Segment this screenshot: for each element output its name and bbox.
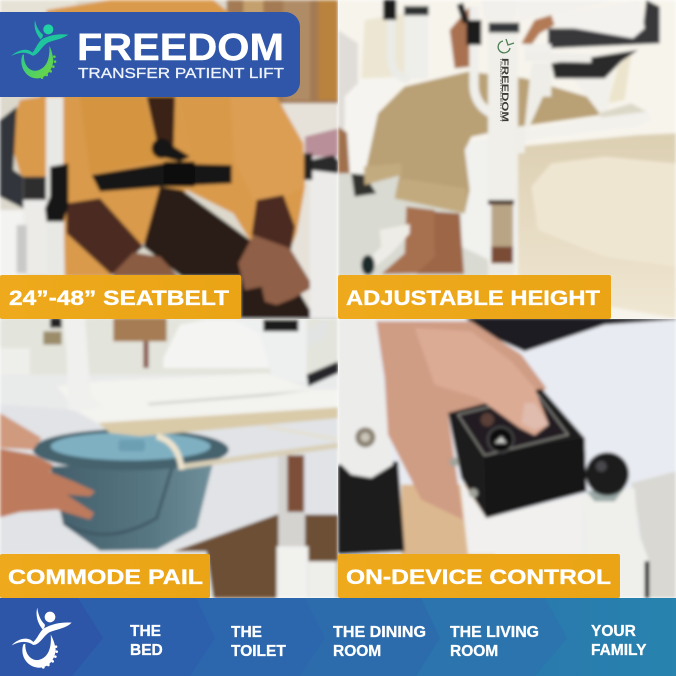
trousers <box>365 72 600 213</box>
main column <box>490 202 515 250</box>
rods and strap <box>183 445 338 466</box>
white bracket <box>631 488 648 566</box>
brand name: FREEDOM <box>77 27 284 69</box>
seat <box>57 373 338 425</box>
label: adjustable height: ADJUSTABLE HEIGHT <box>346 287 600 310</box>
label: on-device control: ON-DEVICE CONTROL <box>346 566 611 589</box>
destination: the bed: THE <box>130 623 161 640</box>
hand <box>376 321 546 520</box>
panel: on-device control photo <box>338 318 676 598</box>
label: commode pail: COMMODE PAIL <box>8 566 203 589</box>
hand <box>0 413 42 450</box>
header badge <box>0 12 300 97</box>
knob <box>586 488 625 501</box>
destination: the living room: ROOM <box>450 643 498 660</box>
belt and clip <box>92 163 232 192</box>
armrest and backrest <box>548 0 660 48</box>
column branding: FREEDOM <box>499 58 510 122</box>
caster <box>371 222 412 266</box>
shirt <box>481 0 518 20</box>
cardigan <box>8 0 305 277</box>
bed <box>518 133 676 318</box>
column <box>460 478 583 555</box>
control box <box>448 389 586 518</box>
icon: white logo <box>12 608 72 669</box>
pail body <box>50 461 213 551</box>
white mattress side <box>460 172 490 259</box>
destination: the dining room: THE DINING <box>333 624 426 641</box>
label: seatbelt <box>0 275 241 319</box>
panel: seatbelt photo <box>0 0 338 322</box>
column branding: TRANSFER PATIENT LIFT <box>499 58 503 123</box>
label: commode pail <box>0 554 210 598</box>
panel: adjustable height photo <box>338 0 676 320</box>
shins <box>381 207 435 274</box>
destination: the bed: BED <box>130 642 163 659</box>
destination: the toilet: TOILET <box>231 643 286 660</box>
finger <box>415 328 549 435</box>
product name: TRANSFER PATIENT LIFT <box>78 66 284 82</box>
white seat right <box>631 471 676 598</box>
icon: freedom logo <box>11 20 68 79</box>
hands <box>113 253 178 277</box>
white tubes <box>474 7 495 115</box>
destination: your family: FAMILY <box>591 642 647 659</box>
inner dark top and trousers <box>147 97 175 157</box>
sleeves <box>67 198 143 275</box>
destination: the living room: THE LIVING <box>450 624 539 641</box>
panel: commode pail photo <box>0 318 338 598</box>
column branding <box>498 39 514 123</box>
destination: the toilet: THE <box>231 624 262 641</box>
label: seatbelt: 24”-48” SEATBELT <box>9 287 229 310</box>
destination: your family: YOUR <box>591 623 636 640</box>
column <box>278 455 305 548</box>
destination: the dining room: ROOM <box>333 643 381 660</box>
label: on-device control <box>338 554 620 598</box>
pole <box>63 319 89 376</box>
pole and clamp <box>338 461 405 555</box>
arms and hands <box>521 15 555 45</box>
footer banner <box>0 598 676 676</box>
label: adjustable height <box>338 275 611 319</box>
chair structure <box>0 107 23 208</box>
far column <box>407 17 426 76</box>
